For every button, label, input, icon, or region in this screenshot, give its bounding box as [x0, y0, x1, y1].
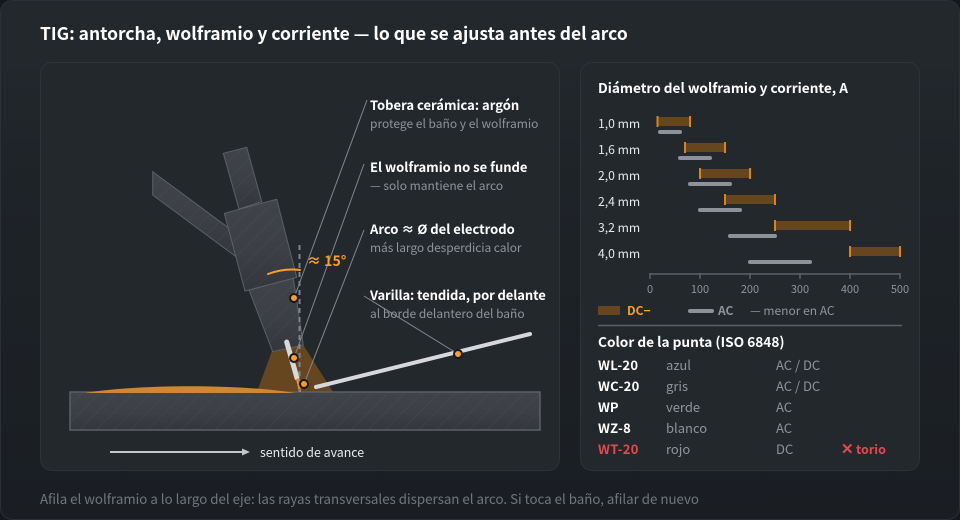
axis labels: 0 [647, 281, 653, 297]
angle arc [268, 270, 300, 274]
legend swatch: AC [690, 309, 712, 313]
legend label: DC: DC− [627, 302, 651, 319]
AC bars [660, 132, 810, 262]
angle label: ≈ 15° [307, 251, 346, 271]
callout: tungsten: El wolframio no se funde [370, 157, 527, 176]
torch body [224, 199, 297, 291]
tip colour table: azul [666, 355, 691, 374]
callout: filler rod [370, 285, 546, 322]
legend note: — menor en AC [750, 302, 835, 319]
tip colour table: WC-20 [598, 376, 640, 395]
tip colour table: WT-20 [598, 439, 639, 458]
callout: nozzle: protege el baño y el wolframio [370, 115, 538, 132]
callout: tungsten: — solo mantiene el arco [370, 177, 503, 194]
tip colour table: gris [666, 376, 688, 395]
table heading: Color de la punta (ISO 6848) [598, 331, 785, 351]
row labels: 2,4 mm [598, 192, 640, 210]
tip colour table: ✕ [841, 438, 854, 459]
callout: arc [370, 219, 522, 256]
torch back cap [223, 147, 262, 209]
tip colour table: blanco [666, 418, 707, 437]
arrow: travel direction [110, 448, 250, 456]
panel: tungsten data [580, 62, 920, 471]
shielding gas cone [257, 343, 333, 392]
marker dots [290, 294, 462, 388]
callout: nozzle [370, 95, 538, 132]
callout: arc: Arco ≈ Ø del electrodo [370, 219, 515, 238]
tip colour table: WP [598, 397, 619, 416]
row labels: 2,0 mm [598, 166, 640, 184]
tip colour table: AC / DC [776, 355, 820, 374]
row labels: 4,0 mm [598, 244, 640, 262]
tip colour table: DC [776, 439, 793, 458]
tungsten electrode [287, 342, 297, 378]
tip colour table: WL-20 [598, 355, 638, 374]
row labels: 1,6 mm [598, 140, 640, 158]
legend label: AC: AC [718, 302, 733, 319]
legend swatch: DC [598, 306, 620, 315]
arc [296, 378, 301, 392]
callout: nozzle: Tobera cerámica: argón [370, 95, 519, 114]
axis labels: 100 [691, 281, 709, 297]
workpiece plate [70, 392, 540, 430]
row labels: 3,2 mm [598, 218, 640, 236]
tip colour table: torio [856, 439, 886, 458]
axis [650, 273, 900, 279]
title: TIG: antorcha, wolframio y corriente — lo que se ajusta antes del arco [40, 21, 628, 46]
filler rod [316, 334, 530, 387]
DC bars [658, 117, 900, 256]
axis labels: 200 [741, 281, 759, 297]
DC range caps [658, 116, 900, 257]
tip colour table: AC [776, 397, 792, 416]
tip colour table: AC / DC [776, 376, 820, 395]
travel direction label: sentido de avance [260, 443, 364, 461]
callout: arc: más largo desperdicia calor [370, 239, 522, 256]
chart heading: Diámetro del wolframio y corriente, A [598, 77, 848, 97]
tip colour table [598, 355, 886, 459]
tip colour table: WZ-8 [598, 418, 631, 437]
ceramic nozzle [249, 278, 303, 352]
axis labels [647, 281, 909, 297]
callout: tungsten [370, 157, 527, 194]
torch handle [153, 172, 236, 257]
tip colour table: AC [776, 418, 792, 437]
row labels: 1,0 mm [598, 114, 640, 132]
panel: torch diagram [40, 62, 560, 471]
torch axis [298, 245, 300, 392]
tip colour table: rojo [666, 439, 690, 458]
row labels [598, 114, 640, 262]
callout: filler rod: Varilla: tendida, por delante [370, 285, 546, 304]
footer note: Afila el wolframio a lo largo del eje: las rayas transversales dispersan el arco. Si toca el baño, afilar de nuevo [40, 489, 699, 508]
leader lines [294, 100, 458, 384]
axis labels: 300 [791, 281, 809, 297]
weld bead [85, 386, 295, 393]
callout: filler rod: al borde delantero del baño [370, 305, 525, 322]
axis labels: 500 [891, 281, 909, 297]
tip colour table: verde [666, 397, 700, 416]
axis labels: 400 [841, 281, 859, 297]
